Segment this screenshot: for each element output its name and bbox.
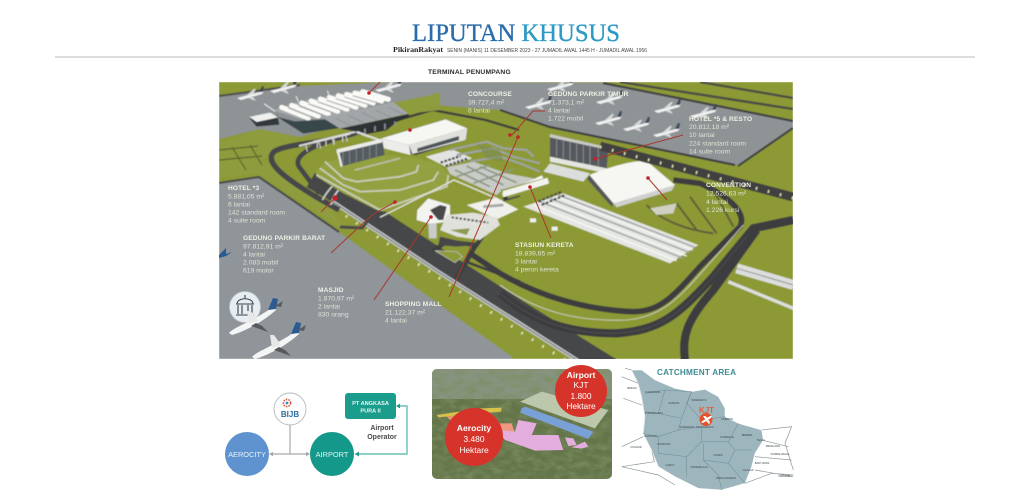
label: gedung parkir timur bbox=[548, 91, 629, 122]
callout: Airport KJT 1.800 hektare: Hektare bbox=[566, 401, 596, 411]
label: terminal penumpang: TERMINAL PENUMPANG bbox=[428, 69, 511, 76]
label: gedung parkir barat bbox=[243, 235, 325, 274]
callout: Airport KJT 1.800 hektare: 1.800 bbox=[571, 391, 592, 401]
callout: Aerocity 3.480 hektare: Aerocity bbox=[457, 423, 491, 433]
icon: KJT airport marker bbox=[699, 406, 714, 426]
map district labels: INDRAMAYU bbox=[691, 398, 707, 402]
map district labels: KUNINGAN bbox=[720, 435, 734, 439]
node: PT Angkasa Pura II: PT ANGKASA bbox=[352, 401, 389, 407]
label: hotel bintang 3 bbox=[228, 185, 285, 224]
label: airport operator: Operator bbox=[367, 434, 397, 441]
label: airport operator bbox=[367, 425, 397, 441]
label: gedung parkir barat: 97.812,91 m² bbox=[243, 244, 284, 250]
callout leader lines bbox=[321, 70, 683, 300]
label: convention: 1.226 kursi bbox=[706, 207, 740, 214]
map district labels bbox=[627, 386, 792, 480]
panel: land area aerial photo bbox=[432, 365, 612, 479]
label: hotel bintang 3: 6 lantai bbox=[228, 202, 250, 208]
label: shopping mall bbox=[385, 301, 442, 324]
node: Aerocity: AEROCITY bbox=[228, 450, 266, 459]
label: shopping mall: 4 lantai bbox=[385, 318, 407, 324]
label: airport operator: Airport bbox=[370, 425, 394, 432]
label: gedung parkir barat: 4 lantai bbox=[243, 252, 265, 258]
map district labels: GARUT bbox=[665, 463, 675, 467]
label: concourse: 39.727,4 m² bbox=[468, 100, 505, 106]
node: BIJB: BIJB bbox=[281, 410, 299, 419]
label: gedung parkir barat: 2.083 mobil bbox=[243, 260, 279, 266]
label: gedung parkir barat: GEDUNG PARKIR BARAT bbox=[243, 235, 325, 242]
node: PT Angkasa Pura II: PURA II bbox=[360, 408, 381, 414]
callout: Aerocity 3.480 hektare: Hektare bbox=[459, 445, 489, 455]
label: convention: 12.526,63 m² bbox=[706, 190, 747, 198]
large planes bbox=[219, 248, 306, 359]
map district labels: PEMALANG bbox=[766, 444, 780, 448]
label: hotel bintang 3: 142 standard room bbox=[228, 210, 285, 216]
icon: KJT airport marker: KJT bbox=[699, 406, 714, 415]
node: BIJB bbox=[274, 393, 306, 425]
map district labels: SUMEDANG bbox=[680, 425, 694, 429]
node: PT Angkasa Pura II bbox=[345, 393, 396, 419]
panel: organisation diagram bbox=[225, 393, 407, 476]
map district labels: KEBUMEN bbox=[779, 474, 792, 478]
label: stasiun kereta: STASIUN KERETA bbox=[515, 242, 574, 249]
callout marker dots bbox=[332, 91, 650, 219]
page header bbox=[55, 18, 975, 57]
map district labels: CIANJUR bbox=[630, 445, 642, 449]
upper apron bbox=[219, 82, 793, 165]
panel: catchment area map bbox=[622, 368, 793, 490]
node: Airport: AIRPORT bbox=[316, 450, 349, 459]
map district labels: MAJALENGKA bbox=[696, 425, 714, 429]
label: stasiun kereta: 18.839,65 m² bbox=[515, 250, 556, 258]
label: masjid bbox=[318, 287, 355, 318]
apron planes bbox=[237, 77, 717, 138]
label: convention: 4 lantai bbox=[706, 199, 728, 206]
label: convention bbox=[706, 182, 751, 214]
callout: Airport KJT 1.800 hektare bbox=[555, 365, 607, 417]
label: hotel bintang 5 dan resto: 14 suite room bbox=[689, 148, 731, 156]
central plaza bbox=[447, 142, 543, 219]
label: shopping mall: 21.122,37 m² bbox=[385, 310, 426, 316]
label: hotel bintang 5 dan resto: 20.812,18 m² bbox=[689, 124, 730, 131]
label: stasiun kereta bbox=[515, 242, 574, 274]
label: hotel bintang 3: 4 suite room bbox=[228, 218, 266, 224]
map district labels: CIAMIS bbox=[714, 453, 723, 457]
map district labels: BANDUNG bbox=[658, 442, 670, 446]
label: masjid: 830 orang bbox=[318, 312, 349, 318]
label: hotel bintang 5 dan resto: 10 lantai bbox=[689, 132, 715, 139]
hotel *3 building bbox=[337, 139, 385, 167]
map district labels: CILACAP bbox=[742, 468, 754, 472]
right ring roads bbox=[470, 180, 793, 360]
date line: SENIN (MANIS) 11 DESEMBER 2023 - 27 JUMADIL AWAL 1445 H - JUMADIL AWAL 1956 bbox=[447, 48, 647, 54]
mosque and mall complex bbox=[417, 198, 520, 282]
label: masjid: MASJID bbox=[318, 287, 344, 294]
node: Aerocity bbox=[225, 432, 269, 476]
map district labels: BREBES bbox=[742, 433, 753, 437]
map district labels: KARAWANG bbox=[646, 390, 660, 394]
label: concourse: 8 lantai bbox=[468, 108, 490, 114]
panel: airport masterplan illustration bbox=[219, 69, 793, 382]
label: hotel bintang 5 dan resto: 224 standard room bbox=[689, 140, 746, 148]
map district labels: BEKASI bbox=[627, 386, 637, 390]
label: stasiun kereta: 4 peron kereta bbox=[515, 266, 559, 274]
label: hotel bintang 3: 5.881,05 m² bbox=[228, 194, 265, 200]
label: stasiun kereta: 3 lantai bbox=[515, 258, 537, 266]
label: convention: CONVENTION bbox=[706, 182, 751, 189]
olive lot near terminal bbox=[221, 145, 262, 168]
label: hotel bintang 5 dan resto: HOTEL *5 & RESTO bbox=[689, 116, 752, 123]
label: shopping mall: SHOPPING MALL bbox=[385, 301, 442, 308]
stasiun kereta bbox=[500, 177, 698, 263]
callout: Aerocity 3.480 hektare: 3.480 bbox=[464, 434, 485, 444]
label: hotel bintang 3: HOTEL *3 bbox=[228, 185, 259, 192]
map district labels: PURBALINGGA bbox=[771, 452, 790, 456]
lower apron bbox=[219, 177, 512, 359]
label: concourse: CONCOURSE bbox=[468, 91, 512, 98]
map district labels: PANGANDARAN bbox=[716, 476, 736, 480]
label: gedung parkir timur: 4 lantai bbox=[548, 108, 570, 114]
map district labels: TASIKMALAYA bbox=[690, 465, 708, 469]
map district labels: BANYUMAS bbox=[755, 461, 770, 465]
passenger terminal bbox=[249, 90, 440, 148]
callout: Airport KJT 1.800 hektare: Airport bbox=[567, 370, 595, 380]
main road bbox=[312, 178, 612, 369]
connector lines bbox=[269, 404, 407, 456]
map of West Java bbox=[622, 368, 793, 490]
map district labels: CIREBON bbox=[721, 417, 733, 421]
icon: mosque badge bbox=[230, 292, 260, 322]
label: concourse bbox=[468, 91, 512, 114]
node: Airport bbox=[310, 432, 354, 476]
callout: Aerocity 3.480 hektare bbox=[445, 408, 503, 466]
label: gedung parkir timur: 1.722 mobil bbox=[548, 116, 584, 122]
label: gedung parkir timur: 71.373,1 m² bbox=[548, 100, 585, 106]
map district labels: BANDUNG bbox=[645, 434, 657, 438]
map district labels: SUBANG bbox=[669, 401, 679, 405]
label: hotel bintang 5 dan resto bbox=[689, 116, 752, 156]
terraced landscaping bbox=[315, 155, 497, 217]
concourse building bbox=[381, 119, 472, 167]
label: masjid: 1.870,97 m² bbox=[318, 296, 355, 302]
newspaper name: PikiranRakyat bbox=[393, 46, 444, 54]
callout: Airport KJT 1.800 hektare: KJT bbox=[574, 380, 588, 390]
gedung parkir timur bbox=[543, 134, 608, 182]
label: gedung parkir barat: 619 motor bbox=[243, 268, 274, 274]
title: Liputan Khusus: LIPUTAN KHUSUS bbox=[412, 18, 620, 47]
convention hall bbox=[587, 161, 675, 207]
label: masjid: 2 lantai bbox=[318, 304, 340, 310]
map heading: CATCHMENT AREA bbox=[657, 368, 736, 377]
map district labels: TEGAL bbox=[757, 438, 766, 442]
map district labels: PURWAKARTA bbox=[645, 411, 663, 415]
terminal access loop bbox=[271, 110, 519, 210]
label: gedung parkir timur: GEDUNG PARKIR TIMUR bbox=[548, 91, 629, 98]
